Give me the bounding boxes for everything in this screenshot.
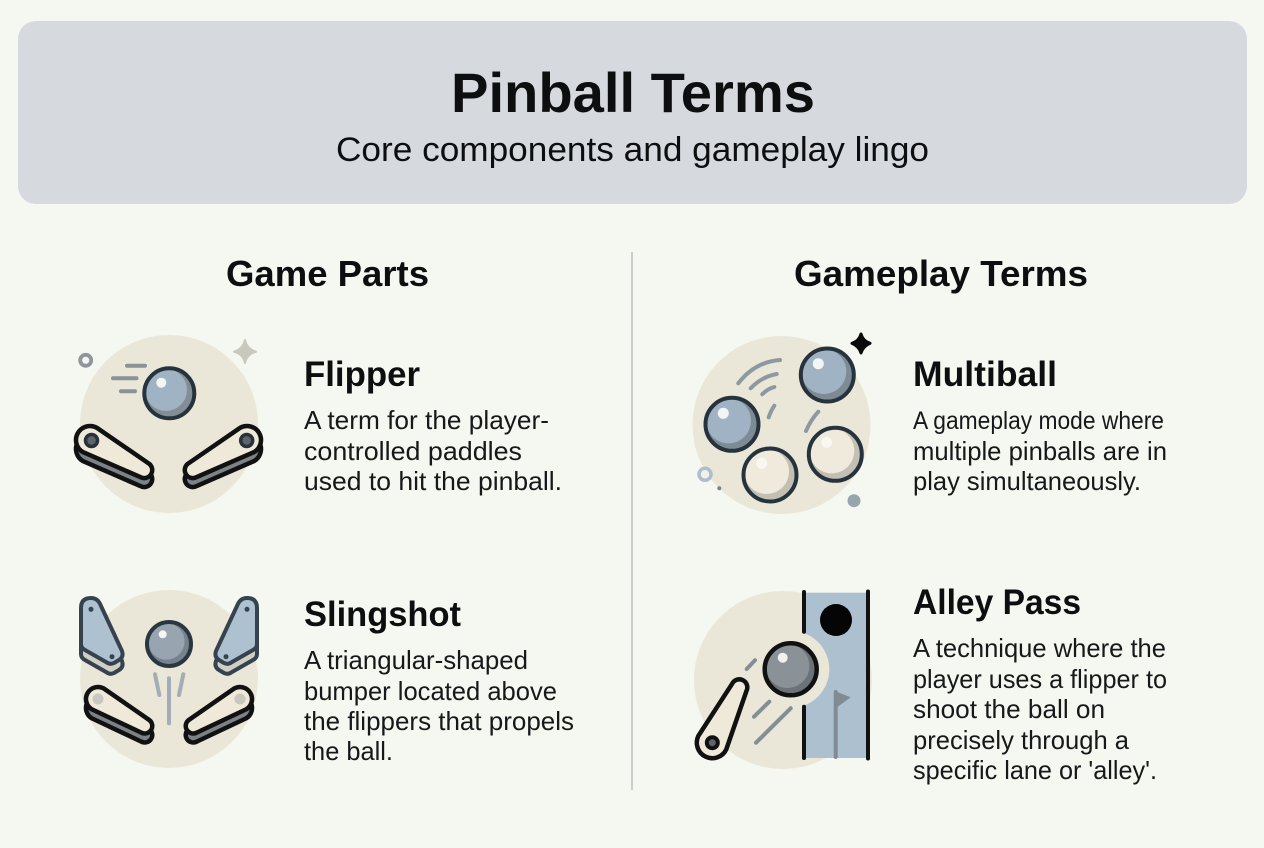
icon: slingshot: [80, 590, 258, 768]
description: Multiball: play simultaneously.: [913, 466, 1141, 496]
description: Alley Pass: [913, 633, 1167, 785]
term: Multiball: Multiball: [913, 355, 1057, 394]
description: Flipper: used to hit the pinball.: [304, 466, 562, 496]
description: Multiball: [913, 407, 1167, 496]
term: Alley Pass: Alley Pass: [913, 583, 1081, 622]
subtitle: Core components and gameplay lingo: [336, 131, 929, 169]
description: Slingshot: bumper located above: [304, 676, 557, 706]
description: Flipper: A term for the player-: [304, 405, 549, 435]
title: Pinball Terms: [451, 62, 815, 124]
description: Alley Pass: shoot the ball on: [913, 694, 1105, 724]
description: Multiball: A gameplay mode where: [913, 407, 1164, 435]
description: Slingshot: the flippers that propels: [304, 706, 574, 736]
right slingshot: [215, 598, 257, 674]
term: Slingshot: Slingshot: [304, 595, 461, 634]
description: Multiball: multiple pinballs are in: [913, 436, 1167, 466]
header banner: [18, 21, 1247, 204]
description: Alley Pass: precisely through a: [913, 725, 1130, 755]
term: Flipper: Flipper: [304, 355, 420, 394]
description: Alley Pass: A technique where the: [913, 633, 1166, 663]
heading: Game Parts: Game Parts: [226, 253, 429, 294]
description: Slingshot: A triangular-shaped: [304, 645, 528, 675]
icon: alley pass: [692, 591, 872, 769]
description: Alley Pass: specific lane or 'alley'.: [913, 755, 1157, 785]
left slingshot: [81, 598, 123, 674]
heading: Gameplay Terms: Gameplay Terms: [794, 253, 1088, 294]
icon: multiball: [692, 334, 870, 514]
description: Slingshot: the ball.: [304, 736, 393, 766]
description: Alley Pass: player uses a flipper to: [913, 664, 1167, 694]
description: Slingshot: [304, 645, 574, 766]
icon: flipper: [71, 335, 266, 513]
description: Flipper: controlled paddles: [304, 436, 522, 466]
description: Flipper: [304, 405, 562, 496]
